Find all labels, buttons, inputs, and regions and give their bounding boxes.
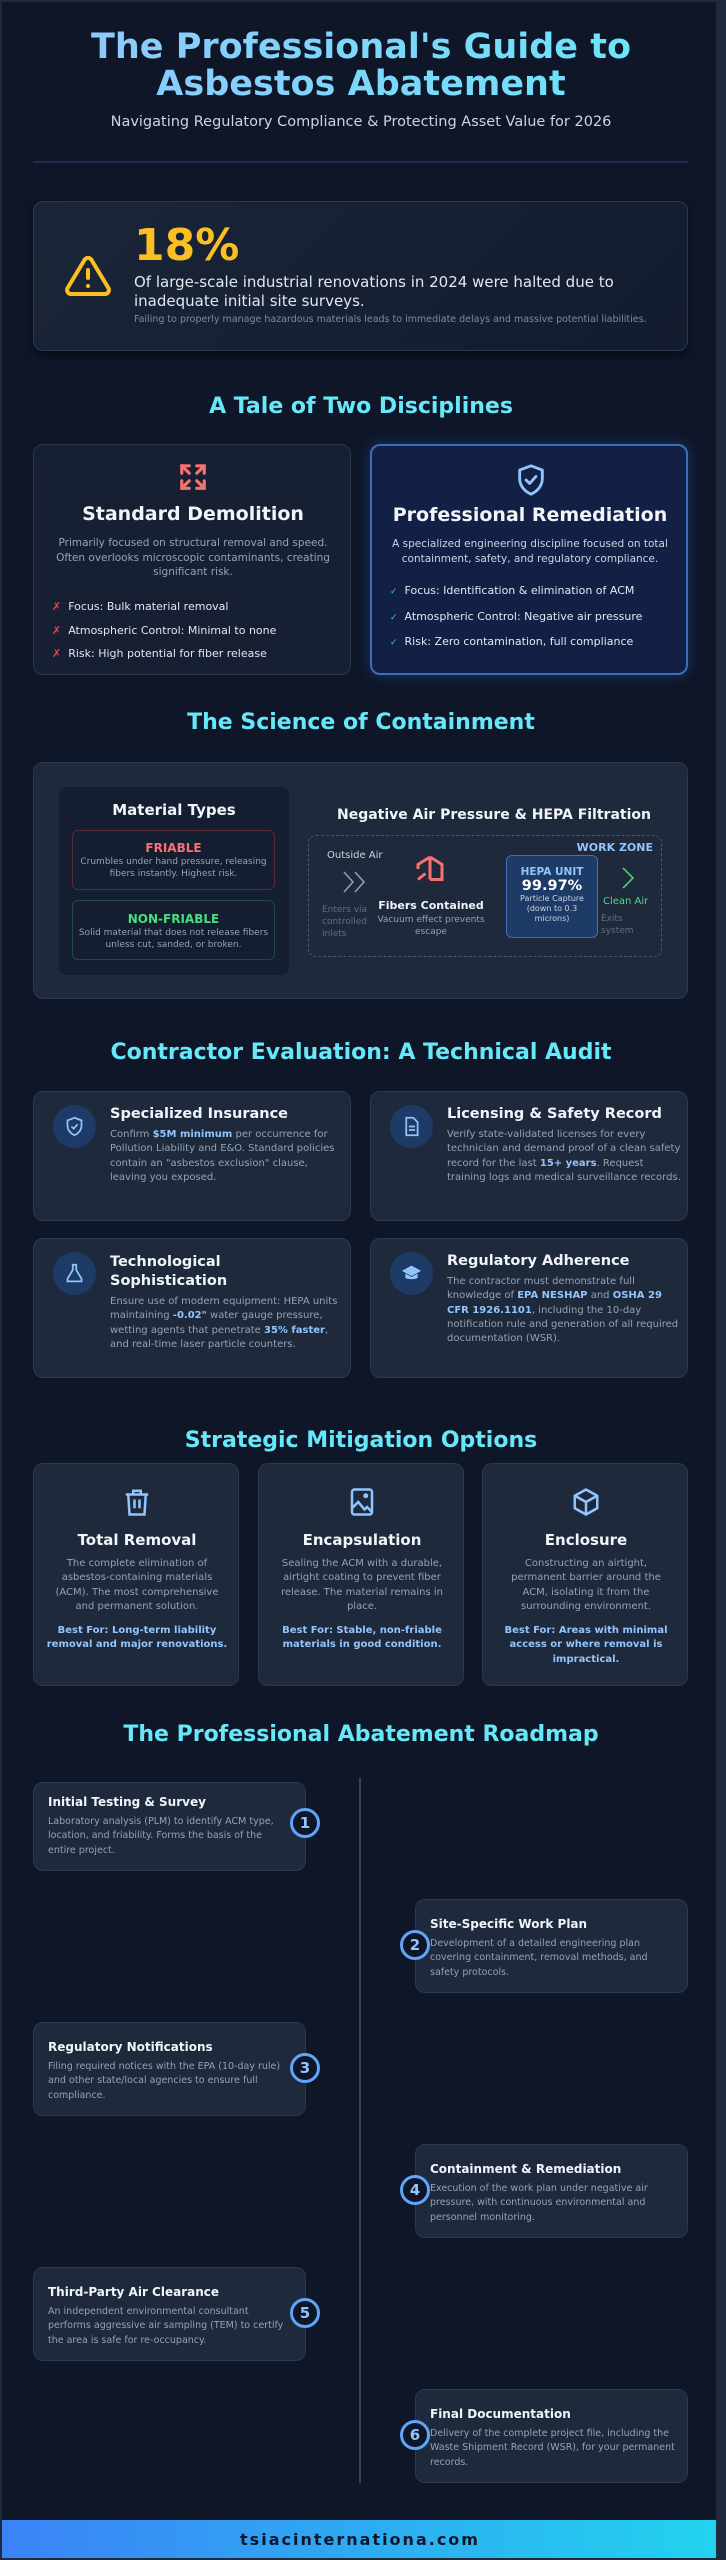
heading: contractor evaluation: Contractor Evaluation: A Technical Audit [110, 1040, 612, 1065]
panel: professional remediation: Professional Remediation [393, 504, 667, 526]
icon: clean air arrow [622, 868, 634, 888]
step 6: Final Documentation [430, 2407, 571, 2421]
stat text: Of large-scale industrial renovations in 2024 were halted due to inadequate initial site surveys. [134, 273, 614, 310]
air flow title: Negative Air Pressure & HEPA Filtration [337, 807, 651, 823]
step 3: Regulatory Notifications [48, 2040, 213, 2054]
HEPA unit [506, 855, 598, 938]
step 5: An independent environmental consultant performs aggressive air sampling (TEM) to certify the area is safe for re-occupancy. [48, 2306, 283, 2346]
number 2: 2 [410, 1936, 420, 1954]
icon: cube [574, 1488, 598, 1516]
diagram: work zone: inlets [322, 929, 346, 939]
HEPA unit: Particle Capture [520, 894, 584, 903]
diagram: work zone: WORK ZONE [577, 841, 653, 854]
step 4: Containment & Remediation [430, 2162, 621, 2176]
friable box: Crumbles under hand pressure, releasing fibers instantly. Highest risk. [80, 857, 267, 879]
stat callout [33, 201, 688, 351]
icon: fibers contained [416, 856, 444, 881]
friable box [72, 830, 275, 890]
card: enclosure: Enclosure [545, 1531, 627, 1549]
heading: science of containment: The Science of Containment [187, 710, 535, 735]
step 4 [415, 2144, 688, 2238]
card: licensing: Verify state-validated licenses for every technician and demand proof of a clean safety record for the last 15+ years. Request training logs and medical surveillance records. [447, 1129, 681, 1183]
stat number: 18% [134, 220, 239, 271]
card: insurance: Confirm $5M minimum per occurrence for Pollution Liability and E&O. Standard policies contain an "asbestos exclusion" clause, leaving you exposed. [110, 1129, 334, 1183]
card: encapsulation: Sealing the ACM with a durable, airtight coating to prevent fiber release. The material remains in place. [281, 1558, 443, 1612]
card: insurance [33, 1091, 351, 1221]
card: technology: Technological [110, 1254, 221, 1270]
icon: expand arrows [180, 464, 206, 490]
icon: document [390, 1105, 433, 1148]
step 1: Initial Testing & Survey [48, 1795, 206, 1809]
panel: standard demolition: Primarily focused on structural removal and speed. Often overlooks microscopic contaminants, creating significant risk. [56, 537, 330, 578]
panel: standard demolition [33, 444, 351, 675]
card: encapsulation [258, 1463, 464, 1686]
step 5: Third-Party Air Clearance [48, 2285, 219, 2299]
non-friable box [72, 900, 275, 960]
icon: image [350, 1488, 374, 1516]
diagram: work zone: Enters via [322, 905, 367, 915]
panel: standard demolition: Standard Demolition [82, 503, 304, 525]
footer [2, 2520, 718, 2560]
icon: graduation [390, 1252, 433, 1295]
card: total removal: Best For: Long-term liability removal and major renovations. [47, 1625, 227, 1650]
card: licensing: Licensing & Safety Record [447, 1106, 662, 1122]
card: technology: Ensure use of modern equipment: HEPA units maintaining -0.02" water gauge pressure, wetting agents that penetrate 35% faster, and real-time laser particle counters. [110, 1296, 337, 1350]
friable box: FRIABLE [145, 841, 202, 855]
card: licensing [370, 1091, 688, 1221]
card: technology [33, 1238, 351, 1378]
step 2 [415, 1899, 688, 1993]
panel: professional remediation [370, 444, 688, 675]
panel: material types: Material Types [112, 801, 236, 819]
icon: trash [126, 1490, 148, 1516]
icon: shield [53, 1105, 96, 1148]
step 1 [33, 1782, 306, 1871]
number 5: 5 [300, 2304, 310, 2322]
HEPA unit: 99.97% [522, 878, 582, 894]
non-friable box: NON-FRIABLE [128, 912, 219, 926]
number 3 [290, 2053, 320, 2083]
diagram: work zone: Outside Air [327, 850, 383, 861]
panel: professional remediation: ✓ Atmospheric Control: Negative air pressure [390, 610, 642, 622]
number 3: 3 [300, 2059, 310, 2077]
step 4: Execution of the work plan under negative air pressure, with continuous environmental and personnel monitoring. [430, 2183, 648, 2223]
panel: professional remediation: A specialized engineering discipline focused on total containment, safety, and regulatory compliance. [392, 538, 668, 564]
heading: roadmap: The Professional Abatement Roadmap [123, 1722, 599, 1747]
step 2: Development of a detailed engineering plan covering containment, removal methods, and safety protocols. [430, 1938, 648, 1978]
card: encapsulation: Best For: Stable, non-friable materials in good condition. [282, 1625, 442, 1650]
card: total removal: Total Removal [78, 1531, 196, 1549]
title: The Professional's Guide to [91, 27, 631, 67]
HEPA unit: HEPA UNIT [521, 866, 583, 878]
step 1: Laboratory analysis (PLM) to identify ACM type, location, and friability. Forms the basis of the entire project. [48, 1816, 274, 1856]
icon: chevrons [344, 872, 365, 892]
card: technology: Sophistication [110, 1273, 227, 1289]
diagram: work zone: Vacuum effect prevents escape [377, 915, 485, 937]
panel: material types [59, 787, 289, 975]
heading: two disciplines: A Tale of Two Disciplines [209, 394, 513, 419]
non-friable box: Solid material that does not release fibers unless cut, sanded, or broken. [79, 928, 268, 950]
card: enclosure: Best For: Areas with minimal access or where removal is impractical. [504, 1625, 668, 1665]
card: total removal [33, 1463, 239, 1686]
card: enclosure: Constructing an airtight, permanent barrier around the ACM, isolating it from the surrounding environment. [511, 1558, 661, 1612]
heading: mitigation: Strategic Mitigation Options [185, 1428, 537, 1453]
number 4: 4 [410, 2181, 420, 2199]
number 6: 6 [410, 2426, 420, 2444]
panel: professional remediation: ✓ Focus: Identification & elimination of ACM [390, 584, 634, 597]
HEPA unit: (down to 0.3 [527, 904, 577, 913]
diagram: work zone: controlled [322, 917, 367, 927]
diagram: work zone: Exits [601, 914, 623, 924]
diagram: work zone: system [601, 926, 634, 936]
panel: standard demolition: ✗ Atmospheric Control: Minimal to none [52, 624, 276, 636]
card: regulatory [370, 1238, 688, 1378]
diagram: work zone: Fibers Contained [378, 899, 484, 912]
step 5 [33, 2267, 306, 2361]
footer: tsiacinternationa.com [240, 2530, 480, 2549]
card: insurance: Specialized Insurance [110, 1106, 288, 1122]
title: Asbestos Abatement [156, 64, 566, 104]
card: enclosure [482, 1463, 688, 1686]
number 2 [400, 1930, 430, 1960]
number 4 [400, 2175, 430, 2205]
card: encapsulation: Encapsulation [303, 1531, 421, 1549]
step 6: Delivery of the complete project file, including the Waste Shipment Record (WSR), for your permanent records. [430, 2428, 675, 2468]
diagram: work zone: Clean Air [603, 896, 648, 907]
number 1 [290, 1808, 320, 1838]
panel: containment [33, 762, 688, 999]
icon: warning [65, 256, 111, 296]
step 6 [415, 2389, 688, 2483]
card: total removal: The complete elimination of asbestos-containing materials (ACM). The most comprehensive and permanent solution. [55, 1558, 219, 1612]
card: regulatory: The contractor must demonstrate full knowledge of EPA NESHAP and OSHA 29 CFR 1926.1101, including the 10-day notification rule and generation of all required documentation (WSR). [447, 1276, 678, 1344]
number 5 [290, 2298, 320, 2328]
card: regulatory: Regulatory Adherence [447, 1253, 630, 1269]
number 6 [400, 2420, 430, 2450]
HEPA unit: microns) [535, 914, 569, 923]
panel: standard demolition: ✗ Focus: Bulk material removal [52, 600, 228, 613]
panel: professional remediation: ✓ Risk: Zero contamination, full compliance [390, 635, 633, 648]
number 1: 1 [300, 1814, 310, 1832]
panel: standard demolition: ✗ Risk: High potential for fiber release [52, 647, 267, 660]
step 3: Filing required notices with the EPA (10-day rule) and other state/local agencies to ensure full compliance. [48, 2061, 280, 2101]
step 2: Site-Specific Work Plan [430, 1917, 587, 1931]
stat callout: Failing to properly manage hazardous materials leads to immediate delays and massive potential liabilities. [134, 314, 647, 325]
subtitle: Navigating Regulatory Compliance & Protecting Asset Value for 2026 [111, 114, 611, 130]
icon: flask [53, 1252, 96, 1295]
icon: shield check [518, 464, 544, 496]
title [2, 29, 720, 103]
step 3 [33, 2022, 306, 2116]
diagram: work zone [308, 835, 662, 957]
